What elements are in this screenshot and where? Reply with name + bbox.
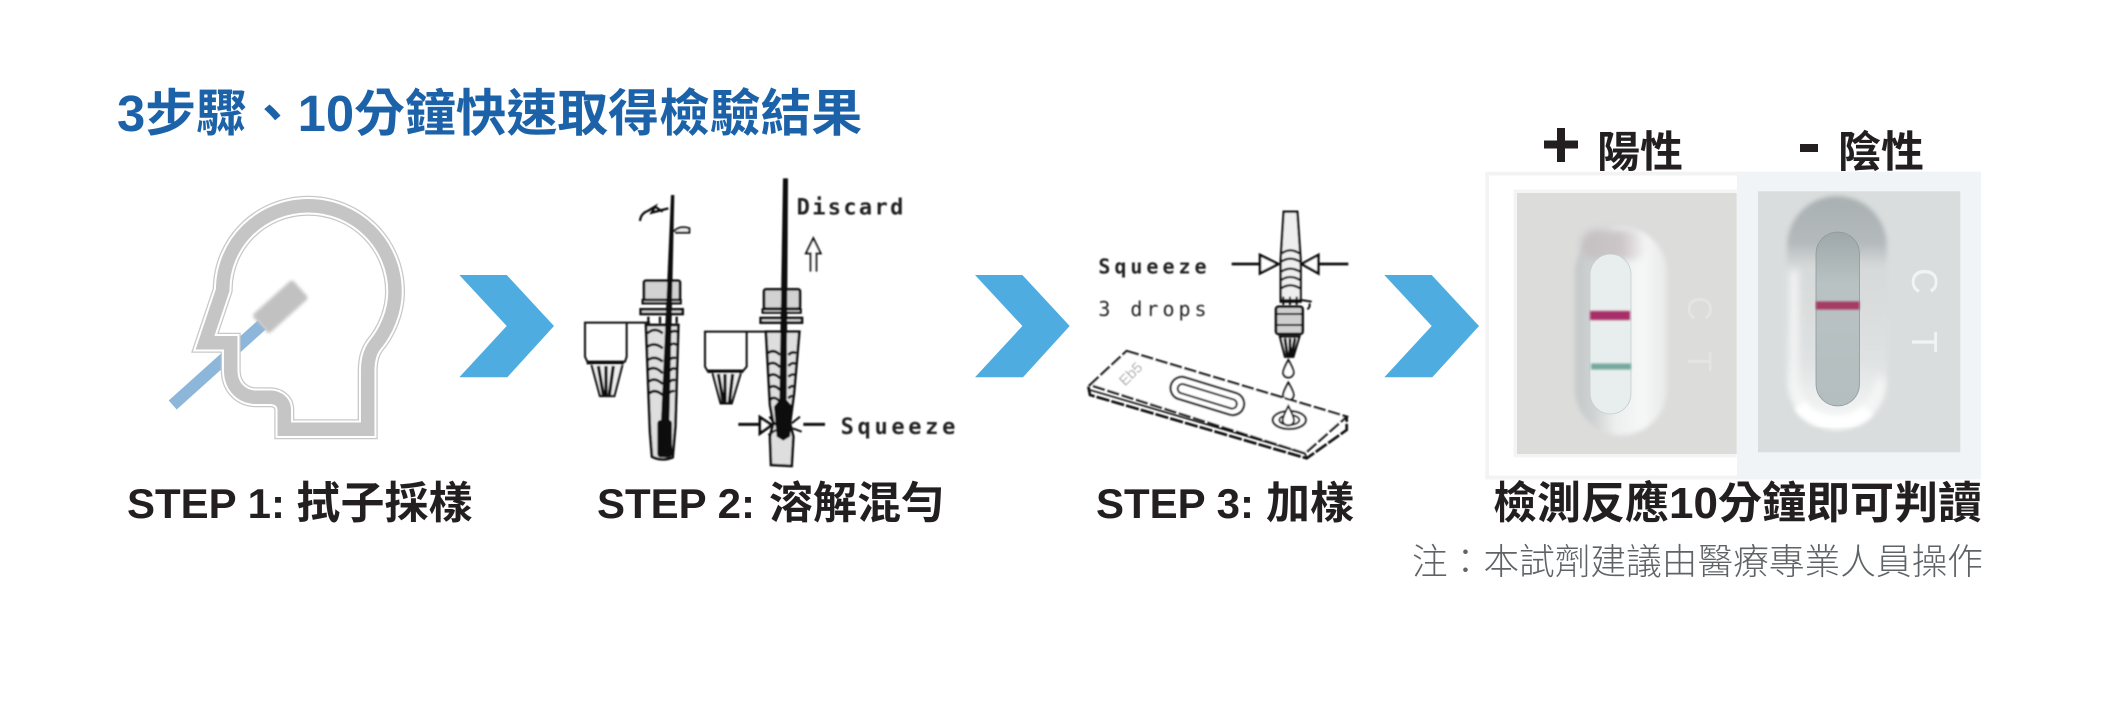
test line: [1591, 364, 1631, 370]
panel: negative result: T: [1904, 331, 1945, 353]
panel: positive result: [1485, 172, 1737, 479]
arrow 2: [975, 275, 1070, 377]
panel: negative result: [1737, 172, 1981, 479]
positive label: [1544, 128, 1683, 177]
embossed letters: C: [1680, 296, 1718, 321]
drops label: 3 drops: [1098, 297, 1211, 321]
arrow 3: [1384, 275, 1479, 377]
illustration: step 2 swab extraction: [585, 178, 959, 466]
control line: [1816, 302, 1860, 310]
cassette mark: Eb5: [1117, 360, 1146, 389]
operator note: 注：本試劑建議由醫療專業人員操作: [1412, 542, 1983, 582]
tube with swab: [585, 195, 689, 459]
swab stick: [173, 325, 262, 405]
panel: positive result: T: [1680, 351, 1718, 372]
tube being squeezed: [705, 178, 825, 466]
step 1 caption: 拭子採樣: [296, 479, 472, 528]
test well: [1787, 196, 1887, 430]
step 3 caption: 加樣: [1266, 479, 1354, 528]
squeeze arrows: [738, 417, 825, 433]
positive label: 陽性: [1597, 129, 1683, 177]
drops: [1283, 360, 1294, 400]
squeeze label: Squeeze: [1098, 254, 1211, 278]
dropper bottle: [1232, 212, 1348, 357]
result caption: 檢測反應10分鐘即可判讀: [1493, 479, 1982, 528]
title: 3步驟、10分鐘快速取得檢驗結果: [117, 85, 862, 142]
test cassette: [1088, 351, 1347, 458]
swab tip: [252, 279, 309, 334]
squeeze arrows: [1232, 255, 1348, 273]
control line: [1590, 311, 1630, 320]
embossed letters: C: [1904, 268, 1945, 294]
squeeze label: Squeeze: [841, 415, 959, 440]
negative label: [1800, 129, 1924, 177]
discard label: Discard: [797, 196, 906, 221]
head outline: [205, 206, 395, 429]
step 2 caption: 溶解混勻: [769, 479, 945, 528]
step 2 caption: STEP 2:: [597, 480, 755, 527]
negative label: 陰性: [1838, 129, 1924, 177]
illustration: step 3 adding sample: [1088, 212, 1348, 458]
icon: head with nasal swab: [173, 206, 395, 429]
up arrow: [806, 238, 821, 272]
result panels: [1485, 172, 1981, 479]
step 1 caption: STEP 1:: [127, 480, 285, 527]
step 3 caption: STEP 3:: [1096, 480, 1254, 527]
arrow 1: [459, 275, 554, 377]
test well: [1575, 227, 1667, 435]
